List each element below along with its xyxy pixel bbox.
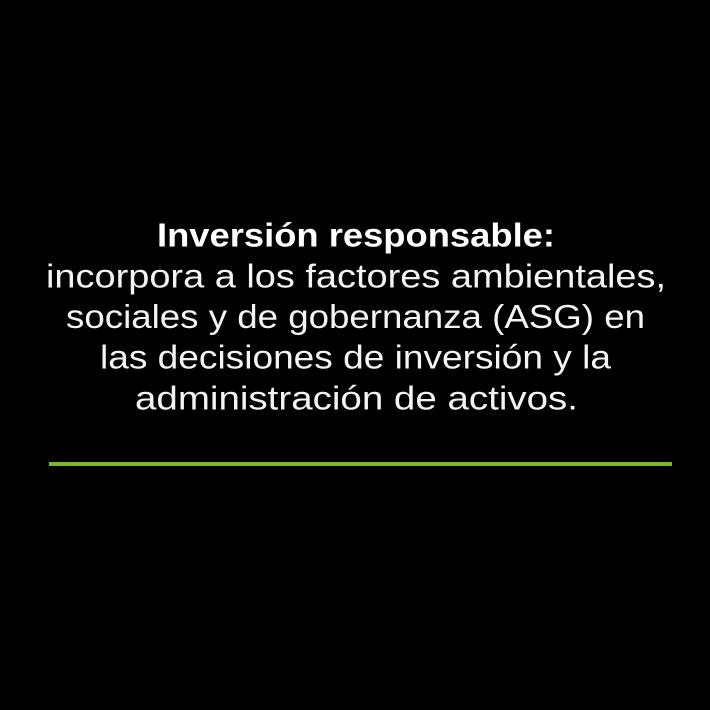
text block: definition (46, 216, 666, 416)
body line 4: administración de activos. (135, 380, 578, 416)
body line 2: sociales y de gobernanza (ASG) en (66, 298, 645, 335)
body line 3: las decisiones de inversión y la (100, 338, 612, 376)
green rule (49, 462, 672, 466)
heading: Inversión responsable: (157, 216, 555, 254)
body line 1: incorpora a los factores ambientales, (46, 258, 666, 294)
